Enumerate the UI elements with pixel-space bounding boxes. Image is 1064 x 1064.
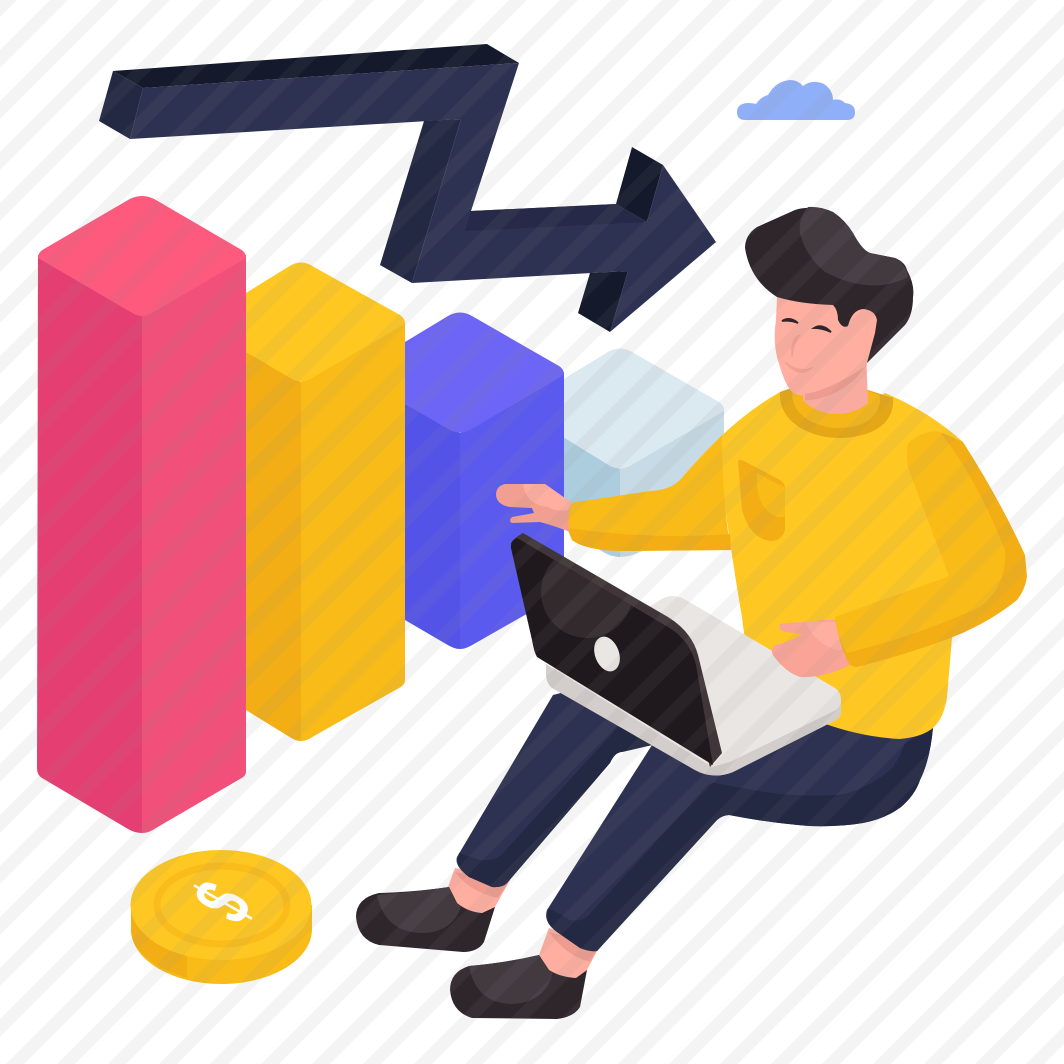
left arm shadow (567, 528, 731, 551)
right arm (835, 432, 1027, 667)
bar: purple (405, 312, 564, 649)
left arm (568, 435, 731, 551)
laptop logo (590, 633, 624, 675)
thigh and shin shadow (547, 728, 933, 951)
person (356, 207, 1027, 1019)
arrow end face (99, 71, 143, 139)
hair highlight (800, 207, 908, 285)
arrow inner shadow (465, 204, 647, 231)
bar: pink (37, 196, 246, 833)
coin edge shadow (131, 905, 187, 978)
arrow top face (113, 44, 519, 88)
torso (680, 392, 963, 739)
hair back (745, 208, 913, 363)
dollar sign: $ (176, 868, 269, 936)
shoe front (450, 955, 587, 1019)
arrow front face (130, 63, 716, 332)
bar: yellow (246, 262, 405, 741)
right arm inner light (835, 432, 1005, 653)
sock front (539, 928, 600, 978)
collar outer (780, 385, 893, 438)
coin face (130, 850, 312, 960)
eye right (814, 326, 831, 332)
laptop lid (511, 538, 713, 765)
zigzag arrow (99, 44, 716, 332)
arrow head back (616, 147, 663, 222)
shoe back highlight (377, 887, 461, 933)
collar inner (792, 385, 880, 428)
pocket flap (757, 473, 785, 517)
neck (803, 350, 868, 414)
arrow inner side (380, 119, 461, 283)
right hand (772, 620, 850, 677)
nose (792, 335, 800, 357)
shoe front highlight (469, 955, 553, 1004)
coin ring (157, 866, 287, 944)
face (775, 297, 877, 396)
jaw shadow (805, 363, 867, 400)
arrow head lower (578, 271, 628, 332)
coin edge (131, 905, 312, 984)
left hand (496, 484, 572, 532)
coin (130, 850, 312, 984)
laptop lid rim (511, 533, 722, 767)
icon: cloud (737, 80, 855, 120)
laptop base (546, 596, 841, 776)
lid highlight (541, 560, 631, 638)
bar: pale blue (516, 348, 724, 557)
pocket (738, 460, 785, 541)
eye left (782, 319, 798, 323)
laptop base edge (546, 664, 841, 776)
sock back (448, 868, 510, 913)
mouth (785, 362, 813, 372)
shoe back (356, 887, 495, 952)
back leg (456, 680, 720, 887)
front leg and thigh (546, 690, 933, 951)
